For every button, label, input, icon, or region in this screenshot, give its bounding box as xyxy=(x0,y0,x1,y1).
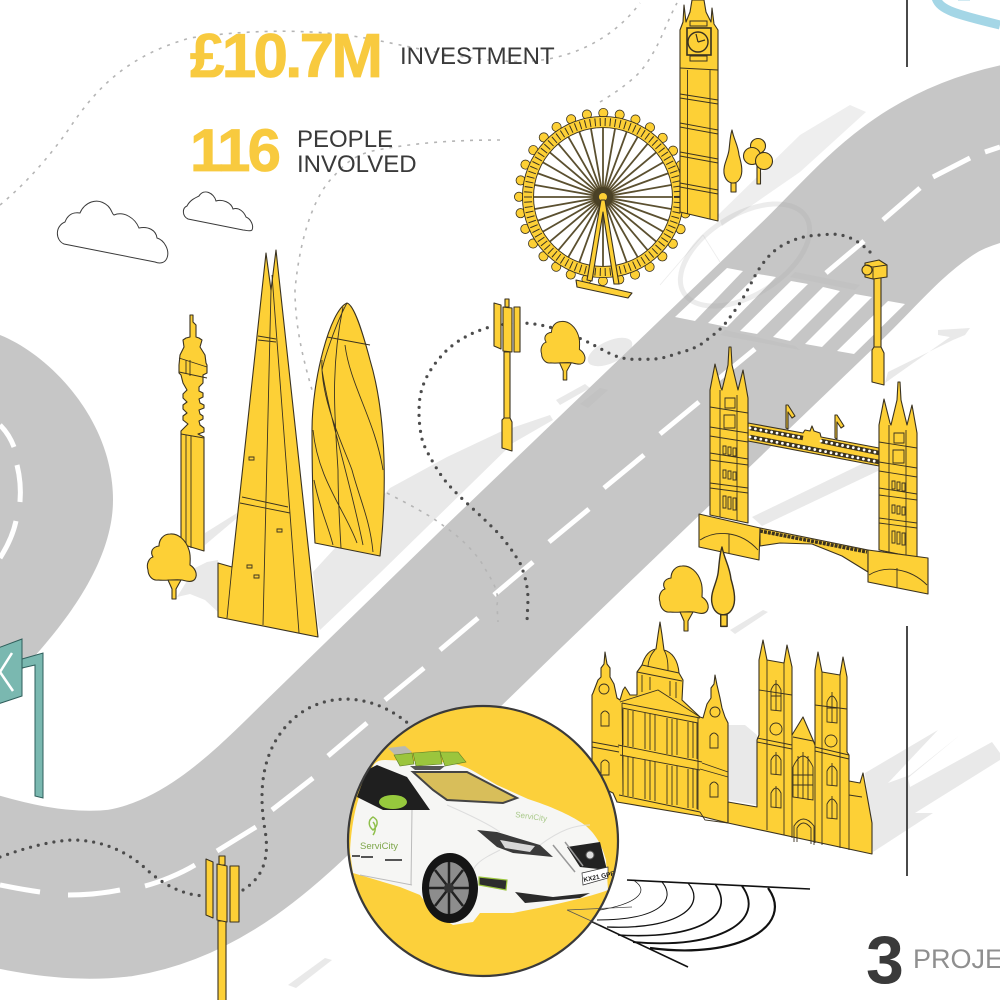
cypress tree near Big Ben xyxy=(724,130,742,192)
light dashed route lines xyxy=(0,3,677,622)
roof sensors xyxy=(388,746,466,770)
landmark: The Gherkin xyxy=(312,303,384,556)
signal pole bottom xyxy=(206,856,239,1000)
section heading: projects xyxy=(866,922,1000,998)
divider lower xyxy=(906,626,908,876)
stat: people involved: INVOLVED xyxy=(297,151,417,178)
white servicity car: KX21 GPF xyxy=(583,871,615,884)
wheel spokes xyxy=(531,125,675,269)
landmark: London Eye xyxy=(519,113,687,298)
car body xyxy=(350,760,608,925)
door mirror xyxy=(379,795,407,809)
windscreen xyxy=(413,772,517,803)
wheel base xyxy=(576,280,632,298)
stat: people involved xyxy=(190,117,417,184)
round tree xyxy=(659,566,708,631)
large cloud xyxy=(57,201,168,263)
landmark: The Shard xyxy=(218,250,318,637)
clouds xyxy=(57,192,253,263)
sponsor logos xyxy=(352,856,402,860)
white servicity car: ServiCity xyxy=(360,841,398,852)
sensor cone inside circle xyxy=(567,907,632,925)
right tower xyxy=(879,382,917,558)
front wheel xyxy=(422,853,478,923)
car photo circle xyxy=(348,706,632,976)
cypress tree xyxy=(712,547,735,626)
landmark: Big Ben xyxy=(680,0,718,221)
tree beside pole xyxy=(541,321,585,380)
people label: PEOPLE xyxy=(297,126,393,153)
grille xyxy=(567,842,607,870)
car logo xyxy=(369,817,377,835)
headlight xyxy=(477,830,553,857)
side sensor panel xyxy=(479,877,507,890)
river xyxy=(936,0,1000,25)
bridge walkways xyxy=(748,423,879,466)
main road xyxy=(0,145,1000,895)
dark dotted route lines xyxy=(0,234,870,896)
abbey door xyxy=(794,819,814,845)
landmark: St Paul's Cathedral xyxy=(592,622,728,823)
round tree near Big Ben xyxy=(744,138,772,184)
number plate xyxy=(582,867,608,885)
landmark: BT Tower xyxy=(179,315,207,551)
section number: 3 xyxy=(866,922,904,998)
wheel hub xyxy=(593,187,613,207)
landmark: Tower Bridge xyxy=(699,347,928,594)
pedestrian crossing xyxy=(675,268,905,354)
road network xyxy=(0,145,1000,895)
upper left road curve xyxy=(0,335,113,690)
bonnet logo: ServiCity xyxy=(515,810,548,823)
teal road sign xyxy=(0,639,43,798)
wheel rim xyxy=(528,122,678,272)
trees by Tower Bridge xyxy=(659,547,735,631)
abbey great window xyxy=(793,752,813,800)
signal pole mid xyxy=(494,299,520,451)
camera pole xyxy=(862,260,887,385)
white servicity car xyxy=(350,746,615,925)
side window xyxy=(357,765,430,810)
people figure: 116 xyxy=(190,117,281,184)
road centre markings xyxy=(0,147,1000,895)
sensor arcs xyxy=(567,880,810,967)
stat: investment xyxy=(190,22,555,91)
landmark: Westminster Abbey xyxy=(728,640,872,854)
door shutline xyxy=(360,810,412,885)
road widening at right bend xyxy=(800,190,1000,413)
wheel capsules xyxy=(519,113,687,281)
investment figure: £10.7M xyxy=(190,22,383,91)
tower shadow bands across crossing xyxy=(580,272,860,408)
wheel shadow on road xyxy=(660,183,827,327)
tree near shard xyxy=(147,534,196,599)
divider top xyxy=(906,0,908,67)
small cloud xyxy=(183,192,253,231)
fog lamp xyxy=(515,892,590,903)
wheel support legs xyxy=(587,200,619,284)
investment label: INVESTMENT xyxy=(400,43,555,70)
bridge flags xyxy=(786,405,795,429)
left tower xyxy=(710,347,748,523)
bridge deck and piers xyxy=(760,528,868,572)
wing and bonnet crease lines xyxy=(447,804,590,870)
ground shadows xyxy=(177,105,1000,988)
